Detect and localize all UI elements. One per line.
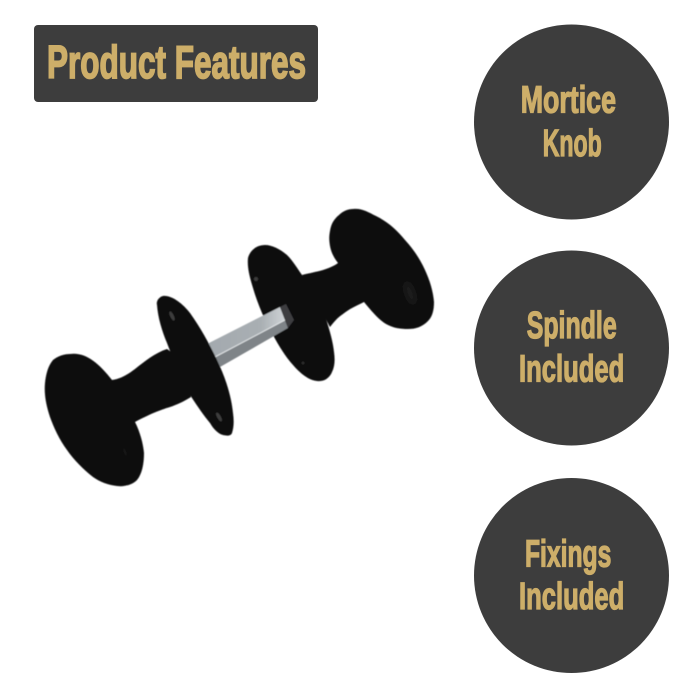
feature badge: Spindle Included	[474, 250, 669, 446]
right knob	[302, 209, 434, 329]
feature badge: Fixings Included: Fixings	[525, 533, 611, 575]
feature badge: Mortice Knob	[474, 24, 669, 220]
spindle	[205, 304, 294, 367]
left rose plate	[157, 296, 234, 436]
feature badge: Spindle Included: Spindle	[527, 305, 617, 347]
product photo: mortice knob set	[45, 209, 434, 486]
left knob	[45, 349, 191, 486]
feature badge: Spindle Included: Included	[519, 348, 624, 390]
feature badge: Mortice Knob: Knob	[543, 123, 602, 165]
right rose plate	[248, 245, 335, 381]
heading: Product Features: Product Features	[47, 36, 306, 88]
heading: Product Features	[34, 25, 318, 102]
feature badge: Fixings Included	[474, 478, 669, 673]
feature badge: Fixings Included: Included	[519, 576, 624, 618]
feature badge: Mortice Knob: Mortice	[521, 80, 616, 122]
